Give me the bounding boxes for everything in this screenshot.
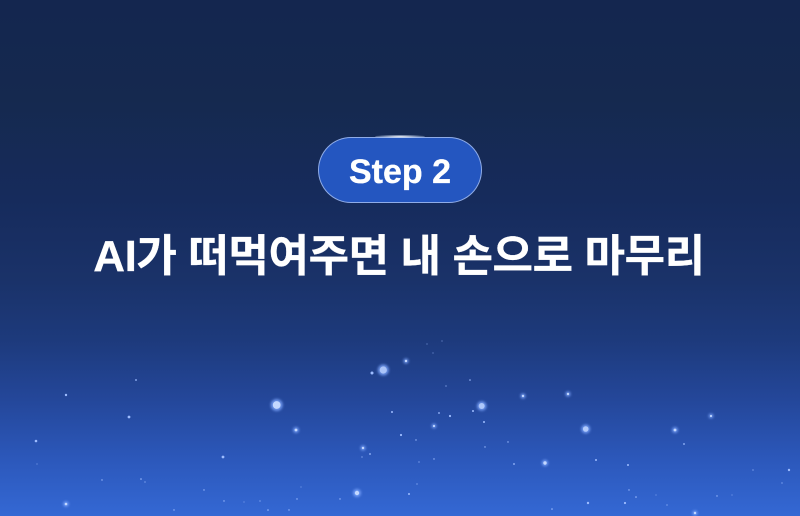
step badge: Step 2: [349, 153, 451, 191]
title: AI가 떠먹여주면 내 손으로 마무리: [93, 232, 705, 281]
step badge: [318, 137, 482, 203]
badge top highlight: [375, 134, 425, 138]
